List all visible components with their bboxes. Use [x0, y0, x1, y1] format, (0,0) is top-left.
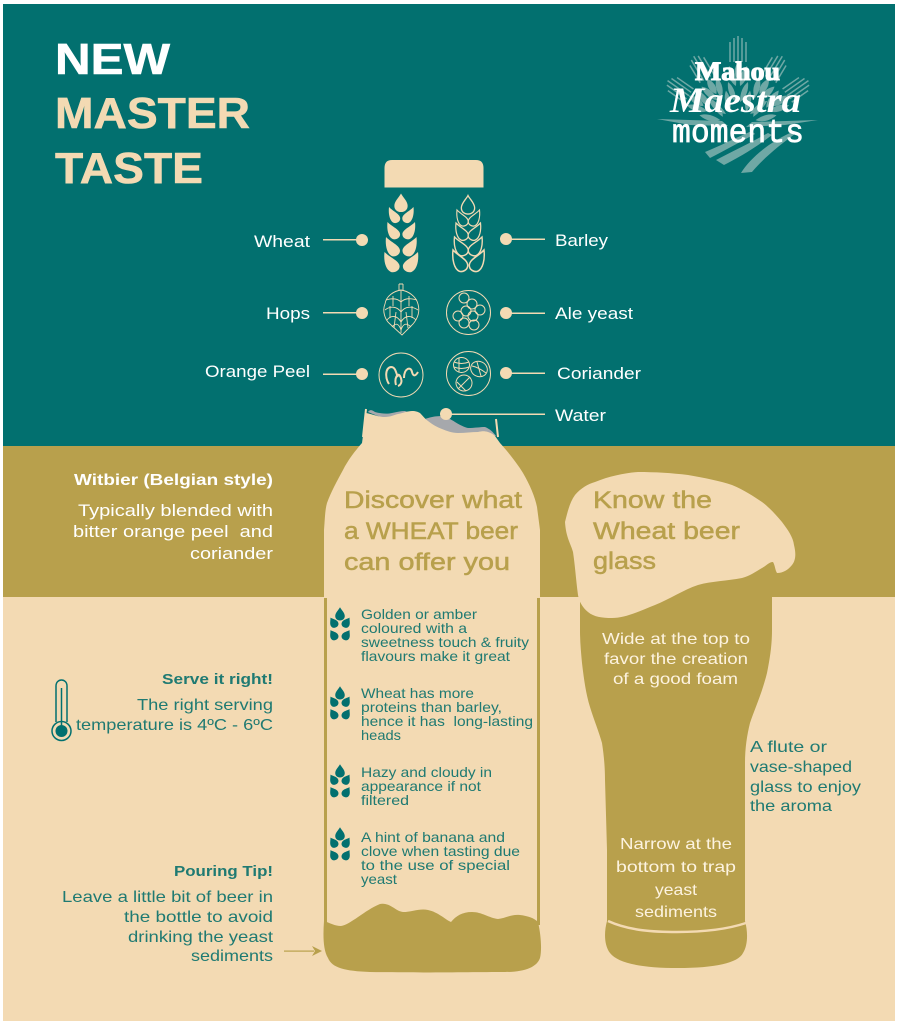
bottle cap	[384, 160, 484, 188]
flute note: glass to enjoy	[750, 779, 861, 796]
flute note: vase-shaped	[750, 759, 852, 776]
bullet text: hence it has long-lasting	[361, 713, 533, 729]
logo: Mahou Maestra moments: Maestra	[669, 80, 801, 120]
heading: discover	[344, 487, 522, 576]
ingredient labels: Orange Peel	[205, 362, 310, 381]
ingredient labels: Hops	[266, 304, 310, 323]
bottle	[323, 408, 541, 972]
pouring tip note: Leave a little bit of beer in	[62, 889, 273, 906]
heading: discover: can offer you	[344, 549, 510, 576]
pouring tip note	[62, 863, 274, 965]
bullet text: proteins than barley,	[361, 699, 502, 715]
title	[55, 35, 250, 193]
glass bottom text	[616, 836, 736, 921]
witbier note: coriander	[190, 544, 273, 563]
witbier note: bitter orange peel and	[73, 522, 273, 541]
bullet text: Hazy and cloudy in	[361, 764, 492, 780]
flute note: A flute or	[750, 739, 828, 756]
ingredient labels: Wheat	[254, 232, 310, 251]
bullet text: A hint of banana and	[361, 829, 505, 845]
icon: wheat	[384, 194, 418, 272]
ingredient labels	[205, 231, 641, 425]
title: NEW	[55, 35, 171, 84]
arrow to sediments	[284, 946, 322, 956]
logo: Mahou Maestra moments: Mahou	[695, 57, 780, 86]
bullet text: filtered	[361, 792, 409, 808]
background band: teal	[3, 4, 895, 447]
glass top text: favor the creation	[604, 651, 748, 668]
pouring tip note: Pouring Tip!	[174, 863, 273, 880]
bullet text: to the use of special	[361, 857, 510, 873]
heading: know the glass: Wheat beer	[593, 518, 740, 545]
bullet text	[361, 606, 533, 887]
ingredient callouts	[323, 233, 545, 415]
flute note: the aroma	[750, 798, 832, 815]
icon: thermometer	[52, 680, 71, 740]
glass top text	[602, 631, 750, 688]
ingredient labels: Ale yeast	[555, 304, 633, 323]
logo: Mahou Maestra moments	[657, 36, 818, 173]
background band: cream	[3, 597, 895, 1021]
bullet text: flavours make it great	[361, 648, 510, 664]
logo: Mahou Maestra moments: moments	[672, 115, 804, 152]
pouring tip note: drinking the yeast	[128, 929, 274, 946]
glass	[565, 472, 795, 968]
heading: know the glass: Know the	[593, 487, 712, 514]
bullet text: coloured with a	[361, 620, 467, 636]
heading: discover: a WHEAT beer	[344, 518, 518, 545]
ingredient labels: Coriander	[557, 364, 641, 383]
ingredient labels: Barley	[555, 231, 609, 250]
bullet text: sweetness touch & fruity	[361, 634, 529, 650]
icon: barley	[453, 196, 484, 272]
witbier note: Typically blended with	[78, 501, 273, 520]
glass bottom text: Narrow at the	[620, 836, 732, 853]
serve it right note: Serve it right!	[162, 671, 273, 688]
bullet text: Wheat has more	[361, 685, 474, 701]
title: TASTE	[55, 144, 203, 193]
icon: ale yeast	[446, 290, 490, 334]
bullet text: yeast	[361, 871, 397, 887]
glass bottom text: sediments	[635, 904, 717, 921]
bullet text: heads	[361, 727, 401, 743]
bullet icons	[327, 607, 353, 862]
serve it right note: The right serving	[137, 697, 273, 714]
heading: know the glass	[593, 487, 740, 575]
glass top text: of a good foam	[613, 671, 738, 688]
glass bottom text: yeast	[655, 882, 698, 899]
bullet text: Golden or amber	[361, 606, 477, 622]
title: MASTER	[55, 89, 250, 138]
glass bottom text: bottom to trap	[616, 859, 736, 876]
witbier note: Witbier (Belgian style)	[74, 472, 273, 489]
glass top text: Wide at the top to	[602, 631, 750, 648]
icon: orange peel	[379, 353, 423, 397]
bullet text: appearance if not	[361, 778, 481, 794]
serve it right note: temperature is 4ºC - 6ºC	[76, 717, 273, 734]
heading: know the glass: glass	[593, 548, 656, 575]
flute note	[750, 739, 861, 815]
heading: discover: Discover what	[344, 487, 522, 514]
icon: hops	[384, 284, 419, 335]
pouring tip note: sediments	[191, 948, 273, 965]
icon: coriander	[446, 352, 490, 396]
bullet text: clove when tasting due	[361, 843, 520, 859]
ingredient labels: Water	[555, 406, 606, 425]
witbier note	[73, 472, 273, 563]
serve it right note	[76, 671, 273, 734]
background band: gold	[3, 446, 895, 598]
pouring tip note: the bottle to avoid	[124, 909, 273, 926]
